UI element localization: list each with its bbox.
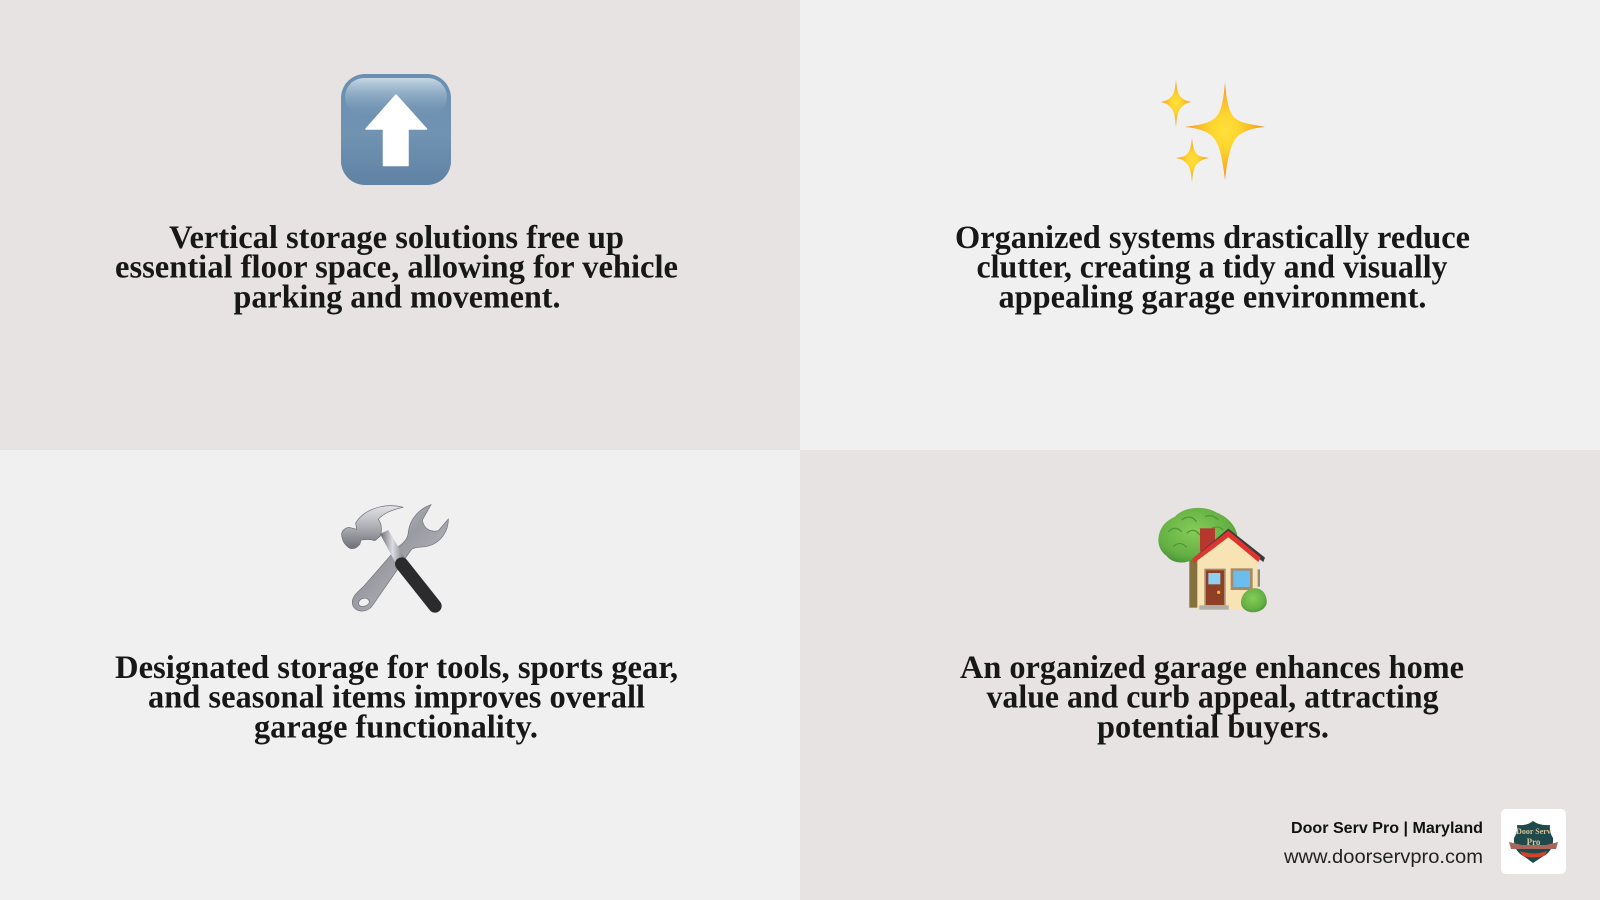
icon: sparkles — [1161, 80, 1265, 182]
text: home value benefit: An organized garage enhances home — [960, 650, 1464, 686]
text: designated storage benefit: and seasonal items improves overall — [148, 680, 645, 716]
text: home value benefit: potential buyers. — [1097, 710, 1329, 746]
panel: vertical storage — [0, 0, 800, 450]
footer: logo: Pro — [1527, 837, 1541, 847]
text: designated storage benefit: garage functionality. — [254, 710, 538, 746]
text: home value benefit: value and curb appeal, attracting — [986, 680, 1439, 716]
text: vertical storage benefit: essential floor space, allowing for vehicle — [115, 250, 678, 286]
panel: organized systems — [800, 0, 1600, 450]
text: vertical storage benefit: Vertical storage solutions free up — [169, 220, 624, 256]
text: vertical storage benefit: parking and movement. — [234, 280, 560, 316]
text: designated storage benefit: Designated storage for tools, sports gear, — [115, 650, 678, 686]
text: organized systems benefit: appealing garage environment. — [998, 280, 1426, 316]
icon: up arrow button — [341, 74, 451, 185]
text: organized systems benefit: clutter, creating a tidy and visually — [976, 250, 1448, 286]
footer: company name: Door Serv Pro | Maryland — [1291, 820, 1483, 837]
footer: website: www.doorservpro.com — [1283, 847, 1483, 868]
footer: logo: Door Serv — [1516, 827, 1551, 836]
panel: designated storage — [0, 450, 800, 900]
text: organized systems benefit: Organized systems drastically reduce — [955, 220, 1470, 256]
footer: logo — [1501, 809, 1566, 874]
panel: home value — [800, 450, 1600, 900]
icon: hammer and wrench — [342, 505, 448, 611]
icon: house with tree — [1158, 508, 1267, 612]
